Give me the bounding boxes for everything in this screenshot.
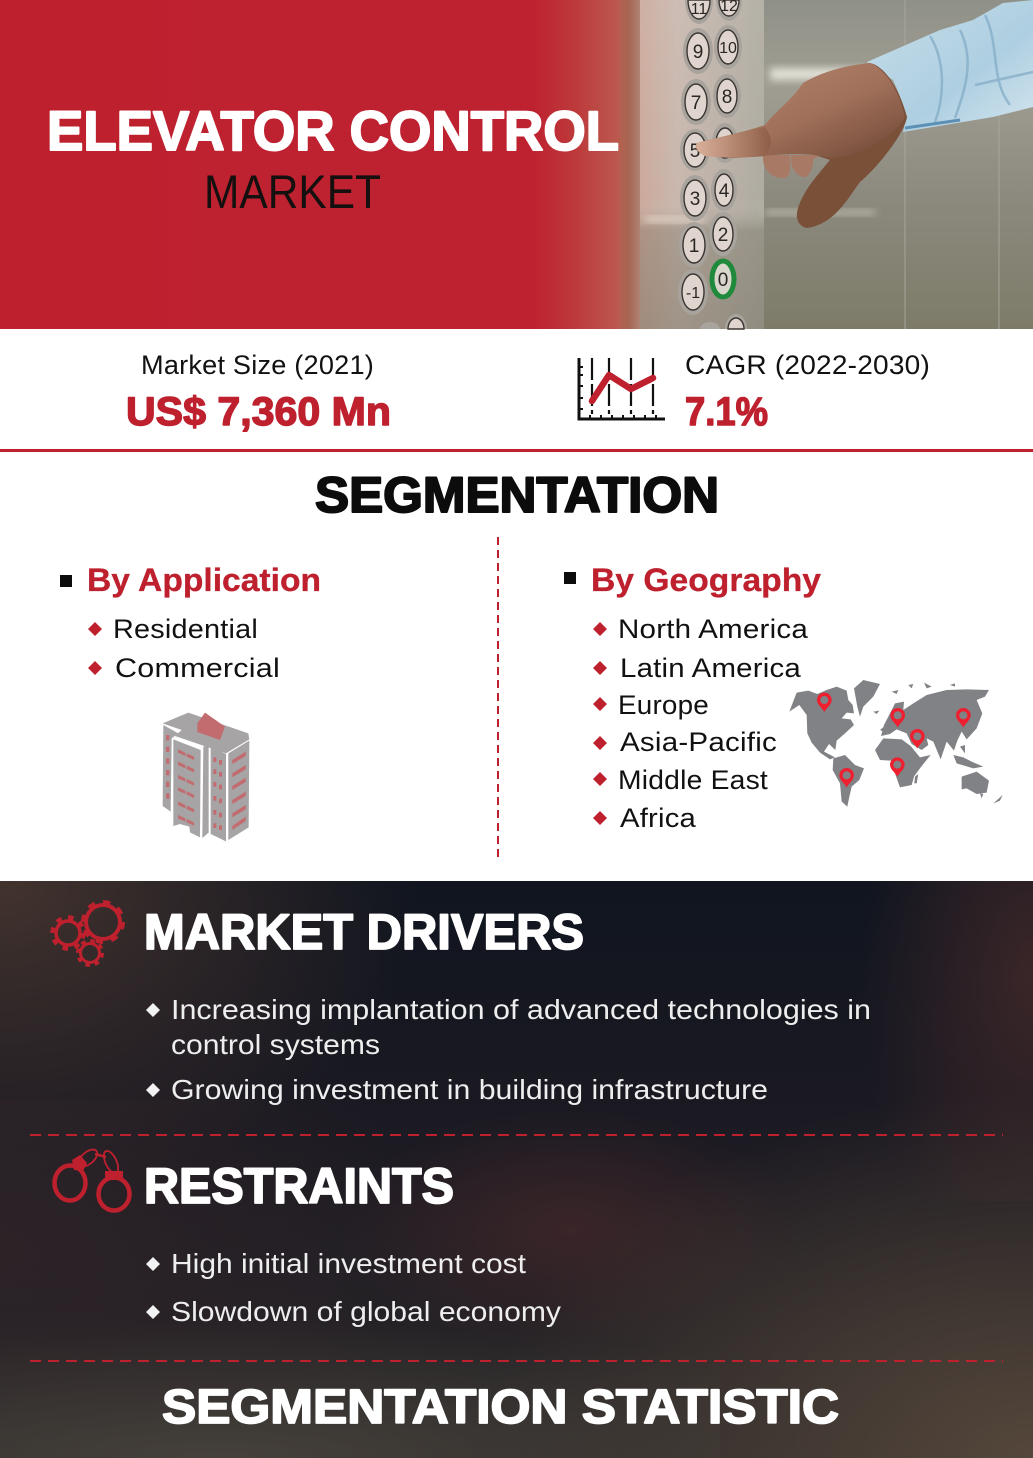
icon: handcuffs [54, 1146, 130, 1210]
heading: segmentation statistic: SEGMENTATION STATISTIC [162, 1381, 839, 1434]
list: application items: Commercial [115, 653, 280, 683]
panel: hero banner [0, 0, 1033, 329]
list: restraint items: Slowdown of global economy [171, 1296, 561, 1327]
icon: elevator buttons: 5 [690, 141, 700, 162]
icon: elevator buttons: 7 [691, 93, 701, 114]
icon: elevator buttons: 8 [722, 87, 732, 108]
list: application items [88, 614, 280, 683]
list: geography items: Asia-Pacific [620, 727, 777, 757]
heading: market drivers: MARKET DRIVERS [144, 904, 584, 960]
icon: elevator buttons: 3 [690, 189, 700, 210]
panel: restraints [54, 1146, 561, 1327]
list: geography items: Europe [618, 690, 709, 720]
marker: square [564, 572, 576, 584]
icon: elevator buttons: 11 [691, 1, 707, 18]
marker: square [60, 575, 72, 587]
list: geography items: Latin America [620, 653, 802, 683]
icon: elevator buttons: 9 [693, 42, 703, 63]
panel: by application [60, 562, 321, 841]
icon: elevator buttons: 4 [719, 181, 730, 202]
list: driver items [146, 994, 871, 1105]
heading: by application: By Application [87, 562, 321, 598]
list: geography items [593, 614, 809, 833]
icon: gears [52, 902, 122, 965]
icon: pointing hand [696, 63, 907, 228]
dark background [0, 881, 1033, 1458]
list: restraint items: High initial investment cost [171, 1248, 526, 1279]
list: driver items: Growing investment in building infrastructure [171, 1074, 768, 1105]
list: geography items: Middle East [618, 765, 768, 795]
list: geography items: Africa [620, 803, 697, 833]
icon: elevator buttons: 2 [718, 225, 728, 246]
icon: elevator buttons: 1 [689, 236, 699, 257]
list: driver items: Increasing implantation of advanced technologies in [171, 994, 871, 1025]
heading: restraints: RESTRAINTS [144, 1158, 454, 1214]
stat: market size value: US$ 7,360 Mn [126, 390, 391, 434]
list: restraint items [146, 1248, 561, 1327]
panel: dark lower section [0, 881, 1033, 1458]
list: driver items: control systems [171, 1029, 380, 1060]
list: geography items: North America [618, 614, 809, 644]
stat: CAGR label: CAGR (2022-2030) [685, 350, 930, 380]
icon: elevator buttons [678, 0, 747, 329]
icon: elevator buttons: 0 [718, 270, 728, 291]
icon: elevator buttons: 10 [719, 40, 737, 57]
hero photo: elevator wall [620, 0, 1033, 329]
heading: segmentation: SEGMENTATION [315, 467, 719, 523]
icon: elevator buttons: -1 [686, 285, 700, 302]
subtitle: MARKET [204, 165, 381, 218]
stat: market size label: Market Size (2021) [141, 350, 374, 380]
icon: world map with pins [789, 680, 1003, 807]
hero red panel [0, 0, 620, 329]
heading: by geography: By Geography [591, 562, 821, 598]
panel: by geography [564, 562, 1003, 833]
list: application items: Residential [113, 614, 258, 644]
icon: shirt sleeve [867, 0, 1033, 132]
panel: market drivers [52, 902, 871, 1105]
panel: key statistics [126, 350, 930, 434]
title: ELEVATOR CONTROL [47, 99, 619, 162]
stat: CAGR value: 7.1% [685, 390, 768, 434]
icon: building [163, 713, 249, 841]
icon: line chart [579, 358, 665, 419]
